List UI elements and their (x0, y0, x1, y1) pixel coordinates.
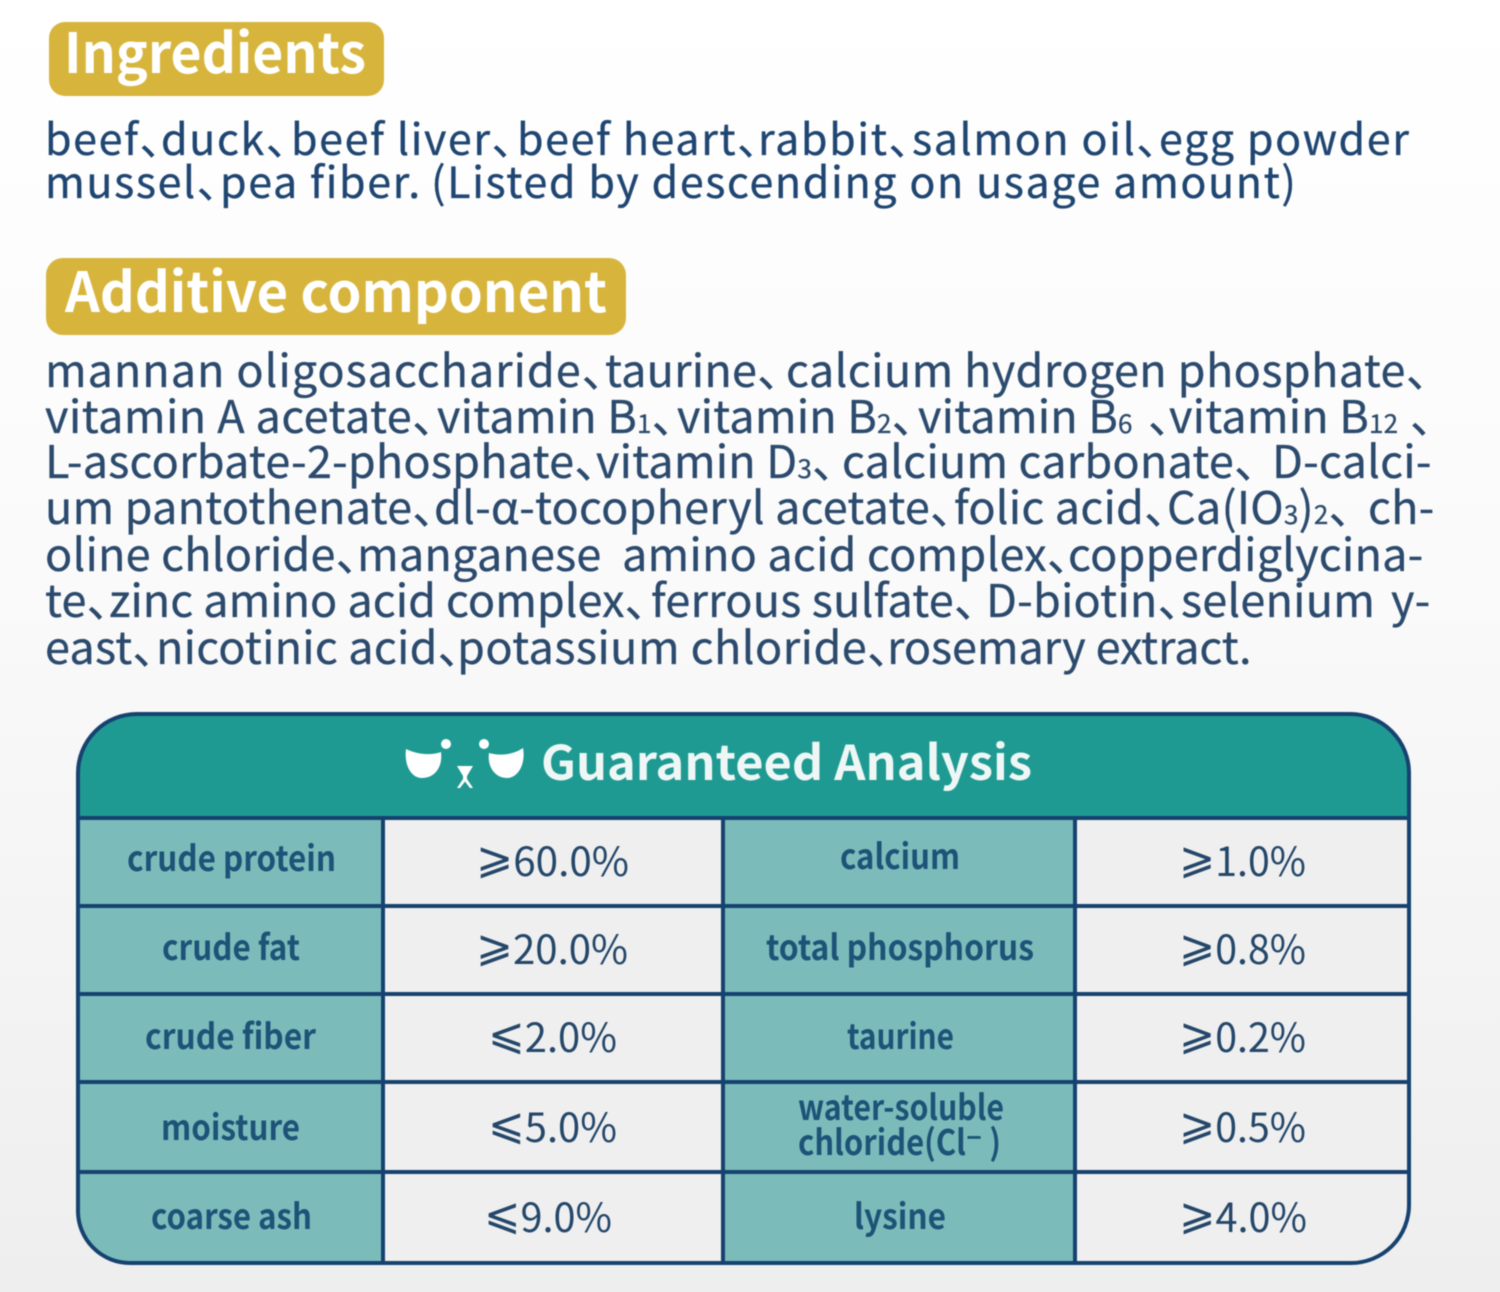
text block: additive list: calcium hydrogen phosphate、 (786, 335, 1451, 400)
text block: additive list: rosemary extract. (887, 612, 1251, 677)
row: coarse ash / lysine: coarse ash (151, 1189, 312, 1240)
text block: additive list: vitamin B12 (1169, 381, 1398, 446)
row: moisture / water-soluble chloride (161, 1080, 1306, 1166)
text block: ingredients list: beef、 (45, 106, 184, 168)
row: coarse ash / lysine: lysine (854, 1189, 946, 1240)
row: crude protein / calcium: 1.0% (1215, 830, 1306, 888)
text block: additive list: mannan oligosaccharide、 (45, 335, 628, 400)
row: crude fiber / taurine: 0.2% (1215, 1006, 1306, 1064)
row: crude fiber / taurine: ⩾ (1179, 998, 1215, 1062)
table: guaranteed analysis (77, 713, 1410, 1264)
text block: additive list: um pantothenate、 (45, 472, 457, 537)
row: crude fiber / taurine: crude fiber (145, 1009, 317, 1060)
row: moisture / water-soluble chloride: 5.0% (525, 1096, 617, 1154)
heading: Ingredients: Ingredients (64, 9, 366, 89)
text block: ingredients list: salmon oil、 (912, 106, 1181, 168)
row: crude fiber / taurine: taurine (847, 1009, 954, 1060)
text block: additive list: folic acid、 (954, 472, 1189, 537)
text block: ingredients list: beef liver、 (291, 106, 536, 168)
text block: additive list: potassium chloride、 (457, 612, 913, 677)
text block: additive list: calcium carbonate、 (842, 426, 1279, 491)
text block: additive list: vitamin B1、 (437, 381, 697, 446)
text block: additive list: te、 (45, 565, 132, 630)
row: crude protein / calcium: ⩾ (1179, 822, 1215, 886)
text block: additive list: 、 (1410, 381, 1455, 446)
text block: additive list: east、 (45, 612, 178, 677)
text block: additive list: amino acid complex、 (622, 519, 1092, 584)
text block: additive list: vitamin A acetate、 (45, 381, 458, 446)
text block: additive list: Ca(IO3)2、 (1167, 472, 1374, 537)
row: moisture / water-soluble chloride: chloride(Cl⁻ ) (798, 1115, 1001, 1166)
text block: additive list: 、 (1148, 381, 1193, 446)
row: crude protein / calcium: crude protein (127, 831, 336, 882)
text block: additive list: selenium (1181, 565, 1375, 630)
text block: ingredients list: beef heart、 (517, 106, 782, 168)
row: moisture / water-soluble chloride: 0.5% (1215, 1096, 1306, 1154)
row: crude protein / calcium: 60.0% (513, 830, 629, 888)
text block: additive list: vitamin D3、 (596, 426, 857, 491)
text block: additive list: manganese (357, 519, 602, 584)
icon: cat face (406, 739, 524, 788)
row: crude fat / total phosphorus: 20.0% (513, 918, 628, 976)
text block: additive list: y- (1391, 565, 1430, 630)
text block: additive list: D-biotin、 (986, 565, 1203, 630)
table title: Guaranteed Analysis (541, 724, 1032, 794)
text block: additive list (45, 335, 1455, 677)
row: coarse ash / lysine (151, 1178, 1307, 1244)
text block: ingredients list: rabbit、 (758, 106, 933, 168)
text block: ingredients list: mussel、 (45, 149, 241, 211)
row: moisture / water-soluble chloride: ⩽ (488, 1088, 525, 1152)
row: crude fiber / taurine (145, 998, 1306, 1064)
text block: ingredients list: (Listed by descending on usage amount) (431, 149, 1298, 211)
row: crude fat / total phosphorus: crude fat (162, 920, 300, 971)
text block: additive list: vitamin B6 (918, 381, 1133, 446)
text block: additive list: nicotinic acid、 (156, 612, 483, 677)
text block: ingredients list: egg powder (1159, 106, 1411, 168)
text block: ingredients list: duck、 (161, 106, 310, 168)
row: crude fiber / taurine: ⩽ (488, 998, 525, 1062)
text block: additive list: zinc amino acid complex、 (109, 565, 670, 630)
row: crude fiber / taurine: 2.0% (525, 1006, 617, 1064)
row: crude fat / total phosphorus: ⩾ (1179, 910, 1215, 974)
text block: additive list: D-calci- (1272, 426, 1432, 491)
heading: Additive component: Additive component (64, 248, 607, 328)
text block: additive list: ch- (1368, 472, 1434, 537)
row: crude fat / total phosphorus: total phosphorus (766, 920, 1034, 971)
row: coarse ash / lysine: ⩽ (484, 1178, 521, 1242)
row: crude protein / calcium (127, 822, 1306, 888)
row: coarse ash / lysine: ⩾ (1179, 1178, 1216, 1242)
row: crude fat / total phosphorus: 0.8% (1215, 918, 1306, 976)
text block: additive list: L-ascorbate-2-phosphate、 (45, 426, 619, 491)
text block: ingredients list: pea fiber. (220, 149, 422, 211)
row: coarse ash / lysine: 9.0% (521, 1186, 612, 1244)
row: moisture / water-soluble chloride: water-soluble (798, 1080, 1004, 1131)
text block: additive list: taurine、 (605, 335, 802, 400)
text block: additive list: ferrous sulfate、 (651, 565, 999, 630)
text block: additive list: oline chloride、 (45, 519, 381, 584)
row: moisture / water-soluble chloride: ⩾ (1179, 1088, 1215, 1152)
row: moisture / water-soluble chloride: moisture (161, 1100, 300, 1151)
row: coarse ash / lysine: 4.0% (1216, 1186, 1307, 1244)
row: crude protein / calcium: calcium (840, 829, 960, 880)
row: crude fat / total phosphorus: ⩾ (476, 910, 513, 974)
text block: additive list: dl-α-tocopheryl acetate、 (434, 472, 975, 537)
row: crude protein / calcium: ⩾ (476, 822, 513, 886)
text block: additive list: vitamin B2、 (677, 381, 937, 446)
row: crude fat / total phosphorus (162, 910, 1306, 976)
text block: additive list: copperdiglycina- (1068, 519, 1423, 584)
